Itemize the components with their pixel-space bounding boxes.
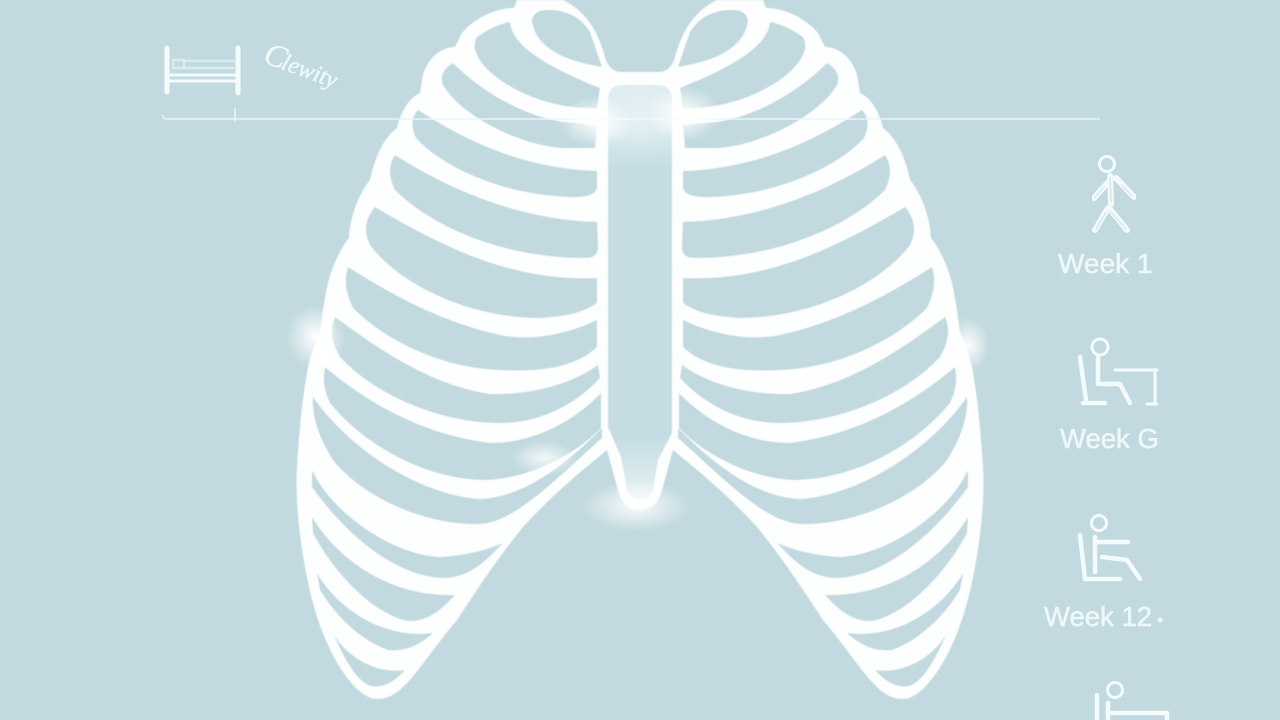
step: final cropped icon — [1097, 682, 1167, 720]
step: week 1 — [1058, 156, 1152, 279]
label: week 12: Week 12 — [1044, 601, 1152, 632]
icon: person seated at desk — [1080, 339, 1157, 404]
label: clarity note: Clewity — [260, 35, 344, 95]
icon: reclined seated person — [1080, 516, 1140, 579]
label: small mark: • — [1157, 610, 1163, 630]
label: week 6: Week G — [1060, 423, 1159, 454]
icon: walking person — [1094, 156, 1134, 230]
icon: bed — [167, 48, 238, 93]
sternum — [608, 85, 672, 500]
timeline line — [163, 108, 1100, 121]
rib cage — [297, 0, 983, 699]
step: week 12 — [1044, 516, 1163, 632]
glow highlights — [286, 76, 990, 532]
left ribs — [297, 0, 640, 699]
step: week 6 — [1060, 339, 1159, 454]
right ribs — [640, 0, 983, 699]
label: week 1: Week 1 — [1058, 248, 1152, 279]
